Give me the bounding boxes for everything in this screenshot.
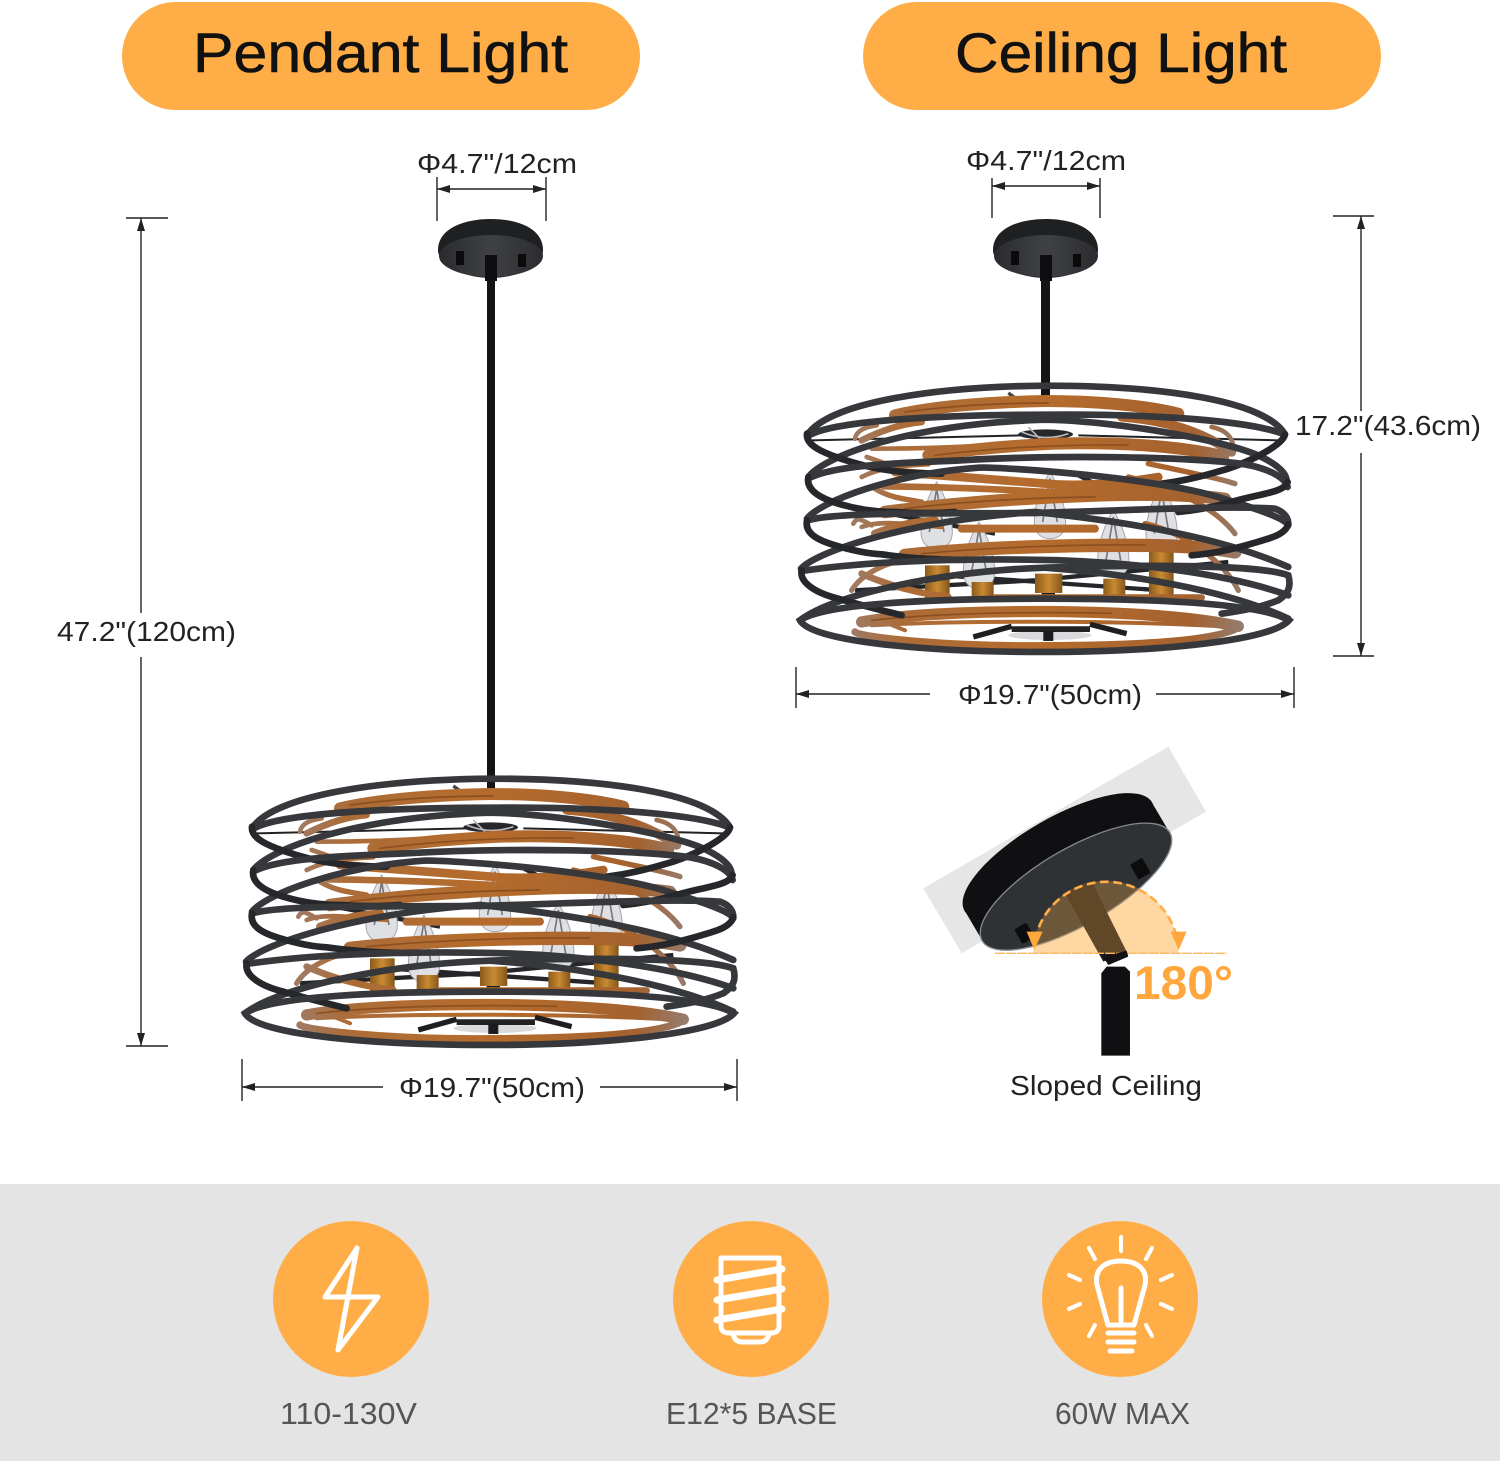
sloped ceiling illustration xyxy=(923,747,1227,1056)
voltage label: 110-130V xyxy=(280,1396,417,1431)
heading: pendant light xyxy=(122,2,640,110)
icon: light bulb xyxy=(1042,1221,1198,1377)
heading: ceiling light: Ceiling Light xyxy=(955,21,1287,84)
180 degree label: 180° xyxy=(1134,956,1233,1009)
pendant height dimension: 47.2"(120cm) xyxy=(57,616,236,647)
ceiling height dimension xyxy=(1295,216,1481,656)
ceiling light fixture xyxy=(800,219,1290,652)
icon: lightning bolt xyxy=(273,1221,429,1377)
pendant light fixture xyxy=(245,219,735,1045)
base label: E12*5 BASE xyxy=(666,1396,837,1431)
ceiling canopy dimension: Φ4.7"/12cm xyxy=(966,145,1126,176)
heading: ceiling light xyxy=(863,2,1381,110)
icon: screw base xyxy=(673,1221,829,1377)
sloped ceiling caption: Sloped Ceiling xyxy=(1010,1070,1202,1101)
wattage label: 60W MAX xyxy=(1055,1396,1190,1431)
pendant width dimension xyxy=(242,1059,737,1103)
heading: pendant light: Pendant Light xyxy=(193,21,568,84)
ceiling height dimension: 17.2"(43.6cm) xyxy=(1295,410,1481,441)
pendant height dimension xyxy=(57,218,236,1046)
ceiling width dimension: Φ19.7"(50cm) xyxy=(958,679,1142,710)
ceiling canopy dimension xyxy=(966,145,1126,218)
specification band xyxy=(0,1184,1500,1461)
pendant canopy dimension xyxy=(417,148,577,221)
pendant width dimension: Φ19.7"(50cm) xyxy=(399,1072,585,1103)
ceiling width dimension xyxy=(796,667,1294,710)
pendant canopy dimension: Φ4.7"/12cm xyxy=(417,148,577,179)
